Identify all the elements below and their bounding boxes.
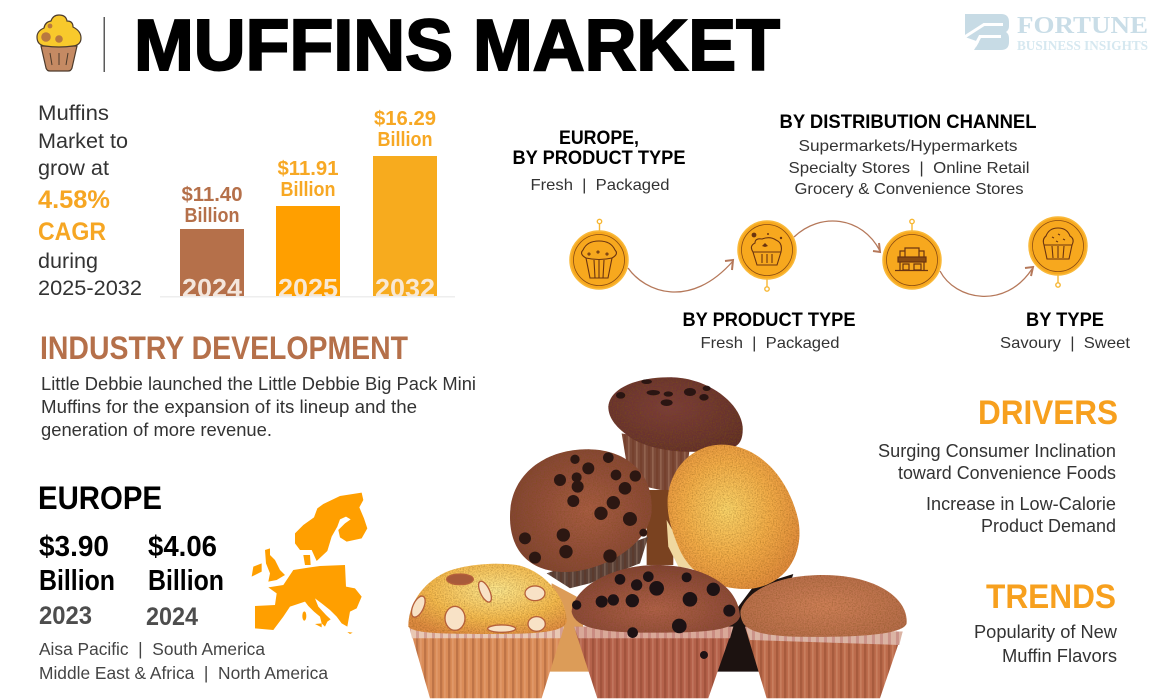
- text block: CAGR statement: Muffins: [38, 102, 109, 125]
- heading: trends: TRENDS: [986, 578, 1116, 616]
- heading: Europe by product type: [512, 128, 686, 194]
- panel: drivers: Surging Consumer Inclination: [878, 441, 1116, 461]
- arrow: third: [940, 267, 1033, 296]
- text block: CAGR statement: 2025-2032: [38, 277, 142, 300]
- bar: 2024: Billion: [184, 205, 240, 227]
- back cup and dark fill: [548, 433, 793, 672]
- text block: industry development: Little Debbie launched the Little Debbie Big Pack Mini: [41, 374, 476, 394]
- bar: 2032: $16.29: [374, 108, 436, 130]
- text block: other regions: Middle East & Africa | North America: [39, 663, 328, 683]
- label: by product type: [682, 310, 856, 352]
- heading: by distribution channel: BY DISTRIBUTION CHANNEL: [780, 112, 1037, 133]
- panel: Europe region: [38, 480, 367, 683]
- text block: industry development: Muffins for the expansion of its lineup and the: [41, 397, 417, 417]
- text block: industry development: generation of more revenue.: [41, 420, 272, 440]
- bar: 2024: $11.40: [182, 184, 242, 206]
- muffin: golden tilted: [667, 445, 799, 589]
- stat: 2024: $4.06: [148, 531, 217, 563]
- icon: store circle three: [883, 219, 941, 289]
- title: MUFFINS MARKET: [134, 6, 780, 86]
- logo: Fortune Business Insights: [963, 13, 1148, 53]
- heading: by distribution channel: Supermarkets/Hypermarkets: [798, 138, 1018, 155]
- bar chart: market size: [160, 108, 455, 303]
- icon: muffin circle one: [570, 219, 628, 289]
- muffin: top dark chocolate: [608, 377, 743, 452]
- illustration: muffin pile: [408, 377, 907, 698]
- bar: 2032: 2032: [375, 273, 435, 303]
- stat: 2024: 2024: [146, 603, 198, 631]
- stat: 2023: $3.90: [39, 531, 109, 563]
- bar: 2032: Billion: [378, 129, 432, 151]
- bar: 2024: 2024: [182, 273, 243, 303]
- muffin: front right crumb: [740, 575, 907, 698]
- bar: 2025: Billion: [280, 179, 336, 201]
- heading: Europe by product type: BY PRODUCT TYPE: [512, 148, 686, 169]
- icon: muffin circle four: [1029, 217, 1087, 287]
- label: by product type: Fresh | Packaged: [700, 335, 840, 352]
- heading: Europe by product type: EUROPE,: [559, 128, 639, 149]
- stat: 2024: Billion: [148, 565, 224, 597]
- heading: industry development: INDUSTRY DEVELOPMENT: [40, 330, 408, 366]
- heading: by distribution channel: [780, 112, 1037, 198]
- logo: Fortune Business Insights: BUSINESS INSIGHTS: [1017, 38, 1148, 53]
- divider line: [104, 17, 105, 72]
- logo: Fortune Business Insights: FORTUNE: [1017, 13, 1148, 39]
- label: by type: BY TYPE: [1026, 310, 1104, 331]
- stat: 2023: Billion: [39, 565, 115, 597]
- bar: 2024: [180, 184, 244, 303]
- panel: drivers: Increase in Low-Calorie: [926, 494, 1116, 514]
- text block: other regions: Aisa Pacific | South America: [39, 639, 265, 659]
- icon: muffin logo: [37, 15, 81, 71]
- heading: by distribution channel: Specialty Stores | Online Retail: [788, 160, 1030, 177]
- panel: trends: [974, 578, 1118, 666]
- label: by type: Savoury | Sweet: [1000, 335, 1131, 352]
- bar: 2032: [373, 108, 437, 303]
- label: by product type: BY PRODUCT TYPE: [682, 310, 856, 331]
- panel: trends: Muffin Flavors: [1002, 646, 1117, 666]
- heading: by distribution channel: Grocery & Convenience Stores: [794, 181, 1024, 198]
- label: by type: [1000, 310, 1131, 352]
- panel: drivers: toward Convenience Foods: [898, 463, 1116, 483]
- map: Europe: [252, 493, 367, 634]
- text block: CAGR statement: [38, 102, 142, 300]
- text block: CAGR statement: Market to: [38, 130, 128, 153]
- panel: drivers: [878, 394, 1118, 536]
- stat: 2024: [146, 531, 224, 631]
- muffin: front centre chocolate chip: [572, 565, 740, 698]
- bar: 2025: 2025: [278, 273, 338, 303]
- text block: CAGR statement: during: [38, 250, 98, 273]
- text block: CAGR statement: CAGR: [38, 218, 106, 246]
- text block: CAGR statement: grow at: [38, 157, 109, 180]
- stat: 2023: 2023: [39, 602, 92, 630]
- bar: 2025: [276, 158, 340, 303]
- icon: decorated muffin circle two: [738, 221, 796, 291]
- panel: drivers: Product Demand: [981, 516, 1116, 536]
- bar: 2025: $11.91: [278, 158, 338, 180]
- stat: 2023: [39, 531, 115, 630]
- muffin: front left almond: [408, 564, 567, 698]
- panel: trends: Popularity of New: [974, 622, 1118, 642]
- arrow: first: [628, 260, 733, 292]
- text block: other regions: [39, 639, 328, 683]
- heading: Europe: EUROPE: [38, 480, 162, 516]
- text block: industry development: [41, 374, 476, 440]
- heading: drivers: DRIVERS: [978, 394, 1118, 432]
- text block: CAGR statement: 4.58%: [38, 186, 110, 214]
- heading: Europe by product type: Fresh | Packaged: [530, 177, 670, 194]
- muffin: middle chocolate chip: [510, 449, 652, 588]
- arrow: second: [794, 221, 880, 252]
- process flow: segmentation: [570, 217, 1087, 296]
